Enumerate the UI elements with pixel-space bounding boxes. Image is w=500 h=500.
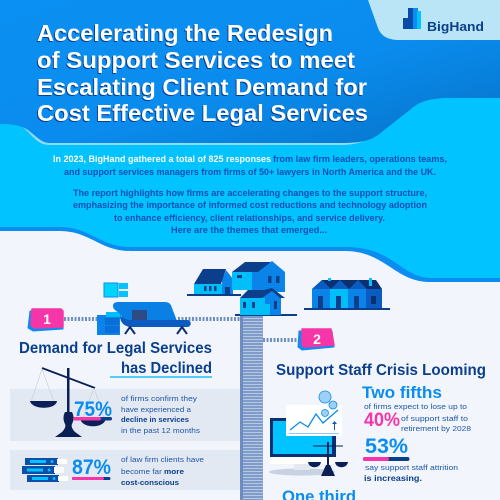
- badge 1: 1: [43, 311, 51, 327]
- title: Escalating Client Demand for: [36, 75, 366, 101]
- progress bar: [72, 477, 110, 480]
- intro text: In 2023, BigHand gathered a total of 825 responses: [53, 154, 271, 164]
- badge 2: 2: [313, 331, 321, 347]
- intro text: [53, 154, 447, 235]
- text: retirement: retirement by 2028: [401, 424, 471, 433]
- intro text: emphasizing the importance of informed cost reductions and technology adoption: [73, 200, 427, 210]
- stat: 75%: [74, 398, 112, 421]
- text: retirement: of firms expect to lose up to: [364, 402, 467, 411]
- description: decline in services: [121, 415, 189, 424]
- heading 1: has Declined: [121, 360, 212, 377]
- intro text: and support services managers from firms of 50+ lawyers in North America and the UK.: [64, 167, 436, 177]
- intro text: Here are the themes that emerged...: [171, 225, 327, 235]
- heading 2: Support Staff Crisis Looming: [276, 362, 486, 379]
- heading 1: [19, 340, 212, 378]
- icon: monitor with chart: [269, 391, 348, 476]
- coins: [319, 391, 337, 416]
- title: of Support Services to meet: [36, 48, 354, 74]
- title: Cost Effective Legal Services: [36, 101, 367, 127]
- badge 2: [298, 329, 334, 350]
- header panel: [0, 0, 500, 145]
- description: become far more: [121, 467, 184, 476]
- title: Accelerating the Redesign: [37, 20, 333, 46]
- stat: 40%: 40%: [364, 410, 400, 431]
- description: of law firm clients have: [121, 455, 204, 464]
- chart card: [286, 405, 342, 436]
- intro text: The report highlights how firms are accelerating changes to the support structure,: [73, 188, 427, 198]
- logo wordmark: BigHand: [427, 19, 484, 34]
- logo panel: [368, 0, 500, 40]
- icon: picture frames: [104, 283, 128, 297]
- icon: terraced houses: [304, 278, 390, 310]
- icon: desk drawers: [97, 312, 121, 335]
- description: of firms confirm they: [121, 394, 197, 403]
- icon: house left: [187, 269, 241, 296]
- text: attrition: [364, 463, 458, 483]
- stat: 87%: [72, 456, 111, 479]
- description: [121, 394, 200, 435]
- description: cost-conscious: [121, 478, 179, 487]
- icon: scales of justice: [30, 368, 106, 437]
- stat: two fifths: Two fifths: [362, 384, 442, 402]
- panel: 75%: [10, 368, 240, 441]
- title: of Support Services to meet: [37, 47, 355, 73]
- text: retirement: [364, 402, 471, 433]
- description: [121, 455, 204, 487]
- intro band: [0, 0, 500, 282]
- icon: BigHand logo: [403, 8, 421, 29]
- small scales: [308, 442, 348, 476]
- text: attrition: is increasing.: [364, 474, 422, 483]
- description: have experienced a: [121, 405, 192, 414]
- badge 1: [28, 309, 63, 331]
- icon: house middle: [232, 261, 285, 292]
- progress bar: [73, 417, 112, 420]
- icon: sofa: [113, 302, 191, 334]
- title: [36, 20, 368, 127]
- title: Escalating Client Demand for: [37, 74, 367, 100]
- heading 1: Demand for Legal Services: [19, 340, 212, 357]
- title: Cost Effective Legal Services: [37, 100, 368, 126]
- panel: 87%: [10, 450, 240, 490]
- intro text: to enhance efficiency, client relationships, and service delivery.: [114, 213, 385, 223]
- description: in the past 12 months: [121, 426, 200, 435]
- title: Accelerating the Redesign: [36, 21, 332, 47]
- progress bar: [363, 457, 410, 461]
- icon: house front: [235, 288, 297, 316]
- connector dotted lines: [64, 319, 298, 340]
- icon: stacked books: [22, 458, 68, 482]
- text: retirement: of support staff to: [401, 414, 468, 423]
- tower: [240, 315, 263, 500]
- intro text: from law firm leaders, operations teams,: [273, 154, 447, 164]
- stat: 53%: 53%: [365, 435, 408, 458]
- text: attrition: say support staff attrition: [365, 463, 458, 472]
